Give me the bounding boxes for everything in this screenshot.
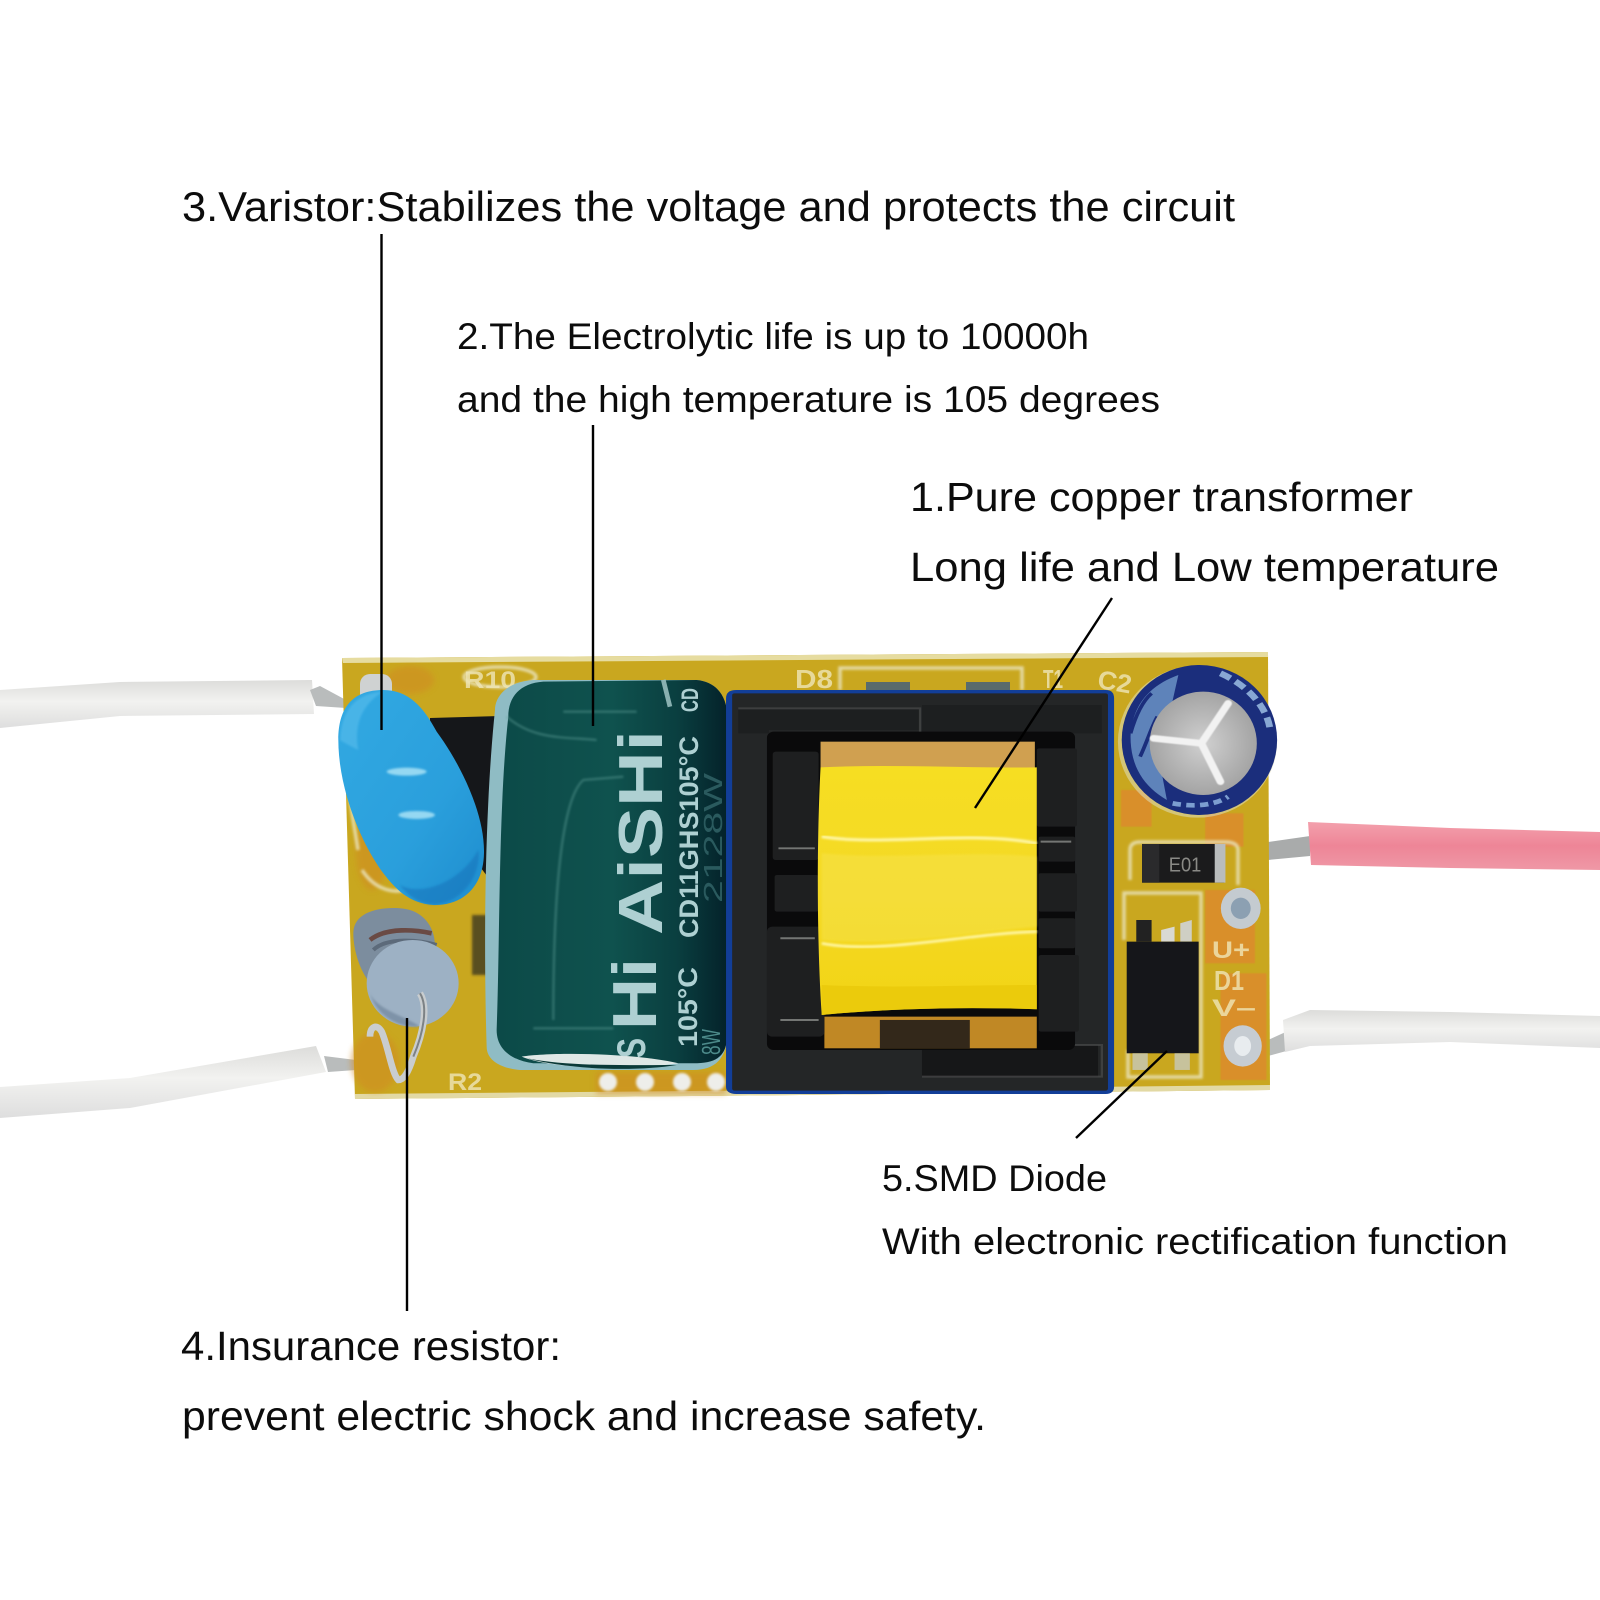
silkscreen labels: D1 bbox=[1214, 965, 1244, 996]
capacitor printed text: 2128W bbox=[698, 772, 728, 903]
varistor: blue disc bbox=[338, 690, 484, 905]
SMD diode bbox=[1127, 920, 1199, 1070]
callout 2 text line 1: 2.The Electrolytic life is up to 10000h bbox=[457, 316, 1089, 357]
silkscreen marks bbox=[349, 667, 1238, 1077]
callout 1: transformer bbox=[910, 474, 1499, 808]
callout 4 text line 1: 4.Insurance resistor: bbox=[181, 1323, 561, 1369]
capacitor printed text bbox=[601, 688, 728, 1058]
varistor lead bbox=[360, 674, 392, 706]
silkscreen labels: V– bbox=[1212, 995, 1256, 1022]
callout 1 text line 2: Long life and Low temperature bbox=[910, 544, 1499, 590]
capacitor printed text: S bbox=[610, 1038, 654, 1058]
silkscreen labels: U+ bbox=[1212, 937, 1250, 964]
capacitor printed text: 105°C bbox=[673, 967, 703, 1047]
silkscreen labels: T1 bbox=[1043, 664, 1063, 694]
callout 4 text line 2: prevent electric shock and increase safety. bbox=[182, 1393, 986, 1439]
fuse resistor bbox=[353, 908, 459, 1080]
small electrolytic capacitor bbox=[1118, 665, 1277, 818]
callout 5: SMD diode bbox=[882, 1051, 1508, 1262]
wire: pink right bbox=[1268, 822, 1600, 870]
capacitor printed text: 8W bbox=[696, 1029, 726, 1055]
wire: top left white bbox=[0, 680, 346, 728]
silkscreen labels bbox=[448, 664, 1256, 1096]
resistor leads bbox=[370, 993, 424, 1080]
capacitor printed text: CD bbox=[677, 688, 704, 712]
callout 2: electrolytic capacitor bbox=[457, 316, 1160, 726]
callout 5 leader line bbox=[1076, 1051, 1167, 1138]
SMD resistor bbox=[1142, 844, 1225, 883]
electrolytic capacitor bbox=[485, 680, 728, 1070]
silkscreen labels: C2 bbox=[1095, 664, 1134, 700]
silkscreen labels: R10 bbox=[464, 667, 516, 694]
core blocks bbox=[767, 748, 1079, 1037]
board seen through window bbox=[821, 742, 1035, 768]
wire: bottom left white bbox=[0, 1046, 356, 1118]
circuit board bbox=[342, 652, 1270, 1099]
callout 5 text line 2: With electronic rectification function bbox=[882, 1221, 1508, 1262]
callout 5 text line 1: 5.SMD Diode bbox=[882, 1158, 1107, 1199]
black component behind varistor bbox=[430, 716, 500, 880]
capacitor printed text: Hi bbox=[601, 958, 670, 1030]
callout 4 leader line bbox=[406, 1018, 408, 1311]
yellow winding bbox=[818, 766, 1037, 1015]
silkscreen labels: D8 bbox=[795, 664, 833, 694]
blue bobbin edge bbox=[726, 690, 1114, 1094]
pads bbox=[599, 1073, 725, 1091]
window bbox=[767, 732, 1075, 1050]
capacitor printed text: CD11GHS105°C bbox=[674, 736, 704, 938]
silkscreen labels: R2 bbox=[448, 1069, 482, 1096]
wire: bottom right white bbox=[1268, 1010, 1600, 1056]
callout 3 text: 3.Varistor:Stabilizes the voltage and protects the circuit bbox=[182, 183, 1235, 230]
callout 4: insurance resistor bbox=[181, 1018, 986, 1439]
callout 1 text line 1: 1.Pure copper transformer bbox=[910, 474, 1413, 520]
orange copper patches bbox=[1121, 790, 1266, 1080]
black frame bbox=[732, 693, 1108, 1091]
callout 1 leader line bbox=[975, 598, 1112, 808]
SMD resistor: E01 bbox=[1169, 854, 1201, 876]
solder joints bbox=[1221, 888, 1262, 1067]
callout 3 leader line bbox=[380, 234, 383, 730]
transformer bbox=[726, 690, 1114, 1094]
callout 2 leader line bbox=[592, 425, 594, 726]
capacitor printed text: AiSHi bbox=[607, 730, 676, 935]
callout 2 text line 2: and the high temperature is 105 degrees bbox=[457, 379, 1160, 420]
